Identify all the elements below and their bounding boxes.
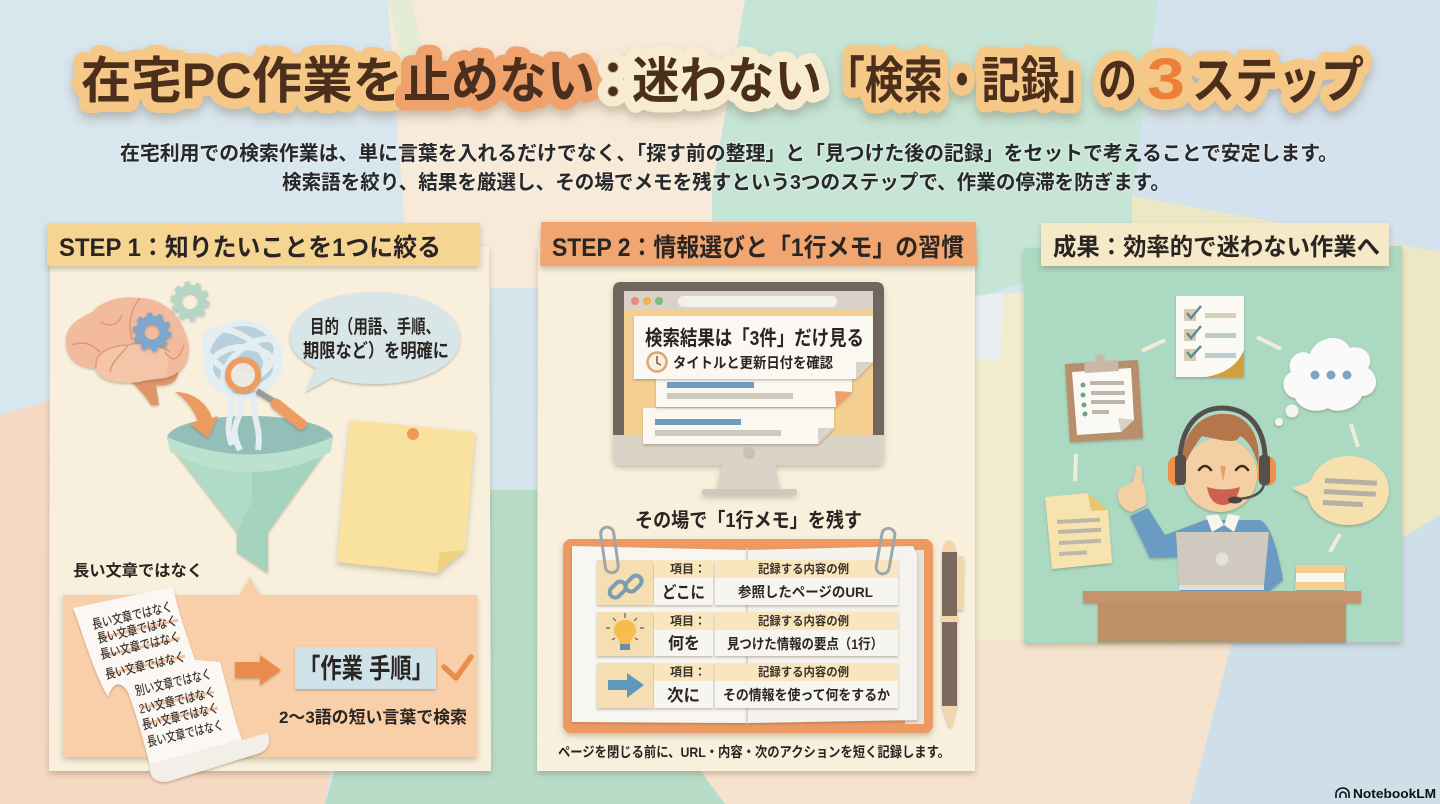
scroll of long text: 長い文章ではなく <box>140 700 220 733</box>
notebook: 記録する内容の例 <box>758 561 849 576</box>
scroll of long text: 長い文章ではなく <box>145 717 225 750</box>
notebook: 項目： <box>670 665 706 679</box>
books <box>1295 565 1345 590</box>
result card 3 <box>643 408 834 444</box>
orange ear cups <box>1168 456 1186 486</box>
scroll of long text <box>73 587 269 782</box>
panel: long vs short search <box>63 577 477 782</box>
panel: step 2 <box>537 222 977 771</box>
icon: monitor <box>613 282 884 495</box>
icon: paperclip right <box>875 527 896 575</box>
notebook: 何を <box>668 634 700 653</box>
connecting ticks <box>1075 337 1358 552</box>
title: 「検索・記録」の <box>826 53 1137 109</box>
intro text <box>120 142 1338 194</box>
icon: clock <box>648 352 666 372</box>
panel: step 1 <box>47 223 491 782</box>
scroll of long text: 長い文章ではなく <box>90 599 174 632</box>
search query box: 「作業 手順」 <box>299 654 433 684</box>
caption: ページを閉じる前に、URL・内容・次のアクションを短く記録します。 <box>558 744 950 760</box>
heading: step 2: STEP 2：情報選びと「1行メモ」の習慣 <box>552 234 964 262</box>
label: long sentences: 長い文章ではなく <box>73 561 203 580</box>
notebook: どこに <box>662 583 705 602</box>
panel 3 paper <box>1024 246 1402 643</box>
icon: speech bubble <box>1292 456 1389 525</box>
notebook: 項目： <box>670 614 706 628</box>
title: 止めない <box>403 53 595 109</box>
icon: pen <box>941 540 964 727</box>
icon: check mark <box>444 657 471 678</box>
title: 3 <box>1147 47 1185 112</box>
icon: arrow <box>608 673 644 698</box>
arrow: to short query <box>235 655 281 685</box>
caption: 2〜3語の短い言葉で検索 <box>279 708 467 727</box>
row: next <box>597 663 898 708</box>
person with headset <box>1118 408 1283 592</box>
panel 1 paper <box>49 246 491 771</box>
icon: magnifier <box>228 360 301 424</box>
eyes and smile <box>1199 466 1248 470</box>
icon: checklist <box>1176 296 1244 377</box>
intro text: 在宅利用での検索作業は、単に言葉を入れるだけでなく、「探す前の整理」と「見つけた後の記録」をセットで考えることで安定します。 <box>120 142 1338 165</box>
result card 1: タイトルと更新日付を確認 <box>673 355 833 372</box>
notebook: 次に <box>667 686 700 705</box>
notebook: 記録する内容の例 <box>758 664 849 679</box>
laptop <box>1176 532 1269 585</box>
heading: step 1 <box>47 223 480 266</box>
thumbs-up hand <box>1118 465 1146 512</box>
icon: link <box>607 573 644 600</box>
intro text: 検索語を絞り、結果を厳選し、その場でメモを残すという3つのステップで、作業の停滞を防ぎます。 <box>282 170 1170 194</box>
title <box>81 47 1364 112</box>
title: 迷わない <box>632 53 822 109</box>
icon: document note <box>1045 493 1112 569</box>
cloud dots <box>1310 370 1352 380</box>
search query box <box>295 647 436 689</box>
title: 在宅PC作業を <box>81 53 403 109</box>
speech bubble <box>290 292 460 392</box>
row: where <box>597 560 898 605</box>
icon: light bulb <box>606 613 644 650</box>
arrow: into funnel <box>175 392 218 438</box>
title: ： <box>588 53 638 109</box>
watermark: NotebookLM: NotebookLM <box>1353 787 1436 801</box>
result card 1 <box>634 316 873 379</box>
notebook: 参照したページのURL <box>738 584 873 600</box>
result card 2 <box>656 378 852 407</box>
notebook: 記録する内容の例 <box>758 613 849 628</box>
icon: funnel with tangled thoughts <box>167 320 333 573</box>
heading: step 2 <box>540 222 977 266</box>
notebook: 見つけた情報の要点（1行） <box>727 636 883 652</box>
icon: clipboard <box>1065 354 1143 442</box>
speech bubble: 目的（用語、手順、 <box>310 316 440 338</box>
panel 2 paper <box>537 246 975 771</box>
face <box>1183 438 1257 512</box>
scroll of long text: 長い文章ではなく <box>95 613 179 646</box>
scroll of long text: 2い文章ではなく <box>137 684 217 717</box>
scroll of long text: 別い文章ではなく <box>133 666 213 699</box>
sticky note <box>337 420 475 573</box>
icon: brain with gears <box>66 284 207 405</box>
desk <box>1083 591 1361 642</box>
scroll of long text: 長い文章ではなく <box>98 629 182 662</box>
icon: paperclip left <box>600 526 619 574</box>
scroll of long text: 長い文章ではなく <box>103 649 187 682</box>
hair <box>1182 414 1259 472</box>
title: ステップ <box>1192 53 1364 109</box>
icon: thought cloud <box>1275 338 1376 426</box>
heading: step 1: STEP 1：知りたいことを1つに絞る <box>59 234 441 262</box>
heading: one line memo: その場で「1行メモ」を残す <box>635 508 862 532</box>
result card 1: 検索結果は「3件」だけ見る <box>645 327 864 350</box>
headset cups and mic <box>1175 455 1186 485</box>
headphone band <box>1180 408 1265 470</box>
notebook <box>563 539 933 733</box>
heading: result <box>1041 223 1389 266</box>
heading: result: 成果：効率的で迷わない作業へ <box>1053 234 1380 261</box>
speech bubble: 期限など）を明確に <box>303 340 449 362</box>
notebook: 項目： <box>670 562 706 576</box>
notebook: その情報を使って何をするか <box>723 687 890 703</box>
arm and body <box>1130 508 1283 592</box>
row: what <box>597 612 898 656</box>
panel: result <box>1024 223 1402 643</box>
